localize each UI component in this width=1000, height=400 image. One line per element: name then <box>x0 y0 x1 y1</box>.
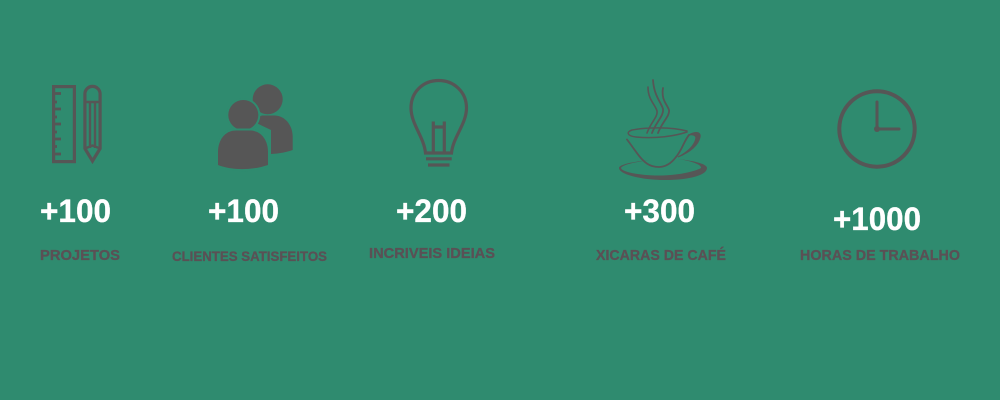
icon: coffee cup <box>619 80 707 180</box>
label: clientes satisfeitos: CLIENTES SATISFEITOS <box>172 248 327 264</box>
number: +100: +100 <box>40 193 111 229</box>
number: +1000: +1000 <box>833 201 921 237</box>
label: horas de trabalho: HORAS DE TRABALHO <box>800 247 960 264</box>
panel: clientes <box>172 84 327 264</box>
label: incriveis ideias: INCRIVEIS IDEIAS <box>369 245 495 262</box>
icon: ruler and pencil <box>53 86 100 162</box>
label: projetos: PROJETOS <box>40 247 120 264</box>
icon: clock <box>839 91 915 167</box>
icon: two people <box>218 84 293 169</box>
panel: ideias <box>369 80 495 262</box>
panel: cafe <box>596 80 726 264</box>
number: +300: +300 <box>624 193 695 229</box>
label: xicaras de cafe: XICARAS DE CAFÉ <box>596 247 726 264</box>
icon: light bulb <box>411 80 466 165</box>
number: +100: +100 <box>208 193 279 229</box>
panel: horas <box>800 91 960 264</box>
number: +200: +200 <box>396 193 467 229</box>
panel: projetos <box>40 86 120 264</box>
